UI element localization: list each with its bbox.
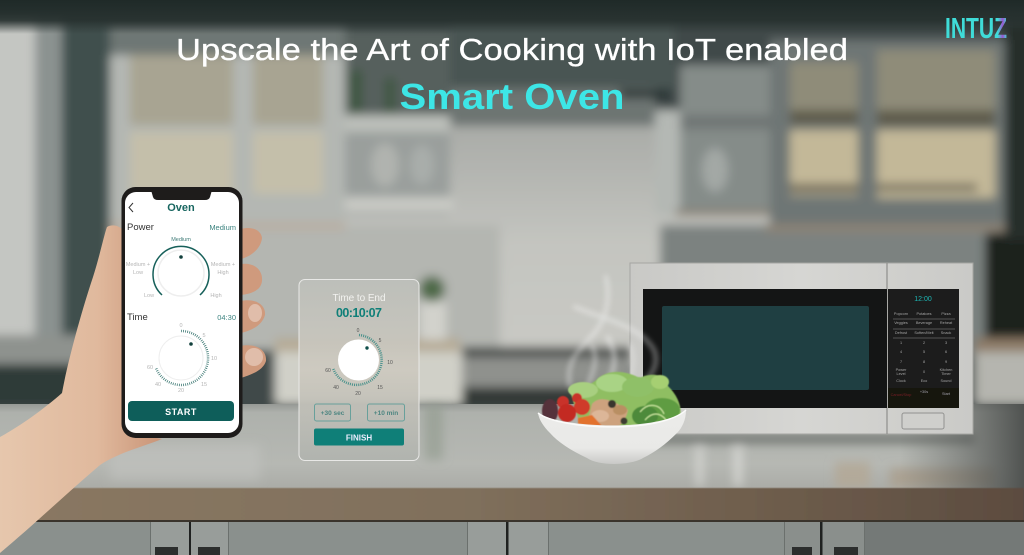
start button (128, 401, 234, 421)
control panel: Pizza (941, 312, 952, 316)
control panel: Power (896, 368, 907, 372)
salad (542, 372, 681, 428)
add 10 min button: +10 min (374, 410, 398, 417)
time heading: 04:30 (217, 313, 236, 322)
time to end label: Time to End (332, 293, 386, 304)
oven body (630, 263, 973, 434)
time dial: 5 (202, 333, 206, 339)
add 10 min button (368, 404, 404, 421)
control panel: 0 (923, 370, 925, 374)
microwave oven (630, 263, 973, 434)
control panel: Cancel/Stop (891, 393, 911, 397)
power dial: Medium + (211, 262, 235, 268)
timer dial (325, 328, 393, 397)
app header (129, 202, 195, 214)
control panel: Defrost (895, 331, 908, 335)
timer dial: 40 (333, 385, 339, 391)
right wall cabinets (655, 20, 1024, 354)
timer dial: 5 (379, 338, 382, 344)
phone frame (122, 187, 242, 438)
timer dial: 60 (325, 368, 331, 374)
power dial (126, 237, 235, 299)
title (176, 32, 848, 117)
phone (122, 187, 242, 438)
timer dial: 0 (357, 328, 360, 334)
control panel: Kitchen (940, 368, 952, 372)
countertop (0, 404, 1024, 490)
countdown: 00:10:07 (336, 306, 382, 320)
finish button: FINISH (346, 434, 372, 442)
side shelf and plant (275, 338, 460, 352)
time dial: 10 (211, 356, 217, 362)
control panel: Sound (941, 379, 951, 383)
start button: START (165, 407, 197, 417)
title: Upscale the Art of Cooking with IoT enabled (176, 32, 848, 67)
add 30 sec button: +30 sec (321, 410, 345, 417)
wooden counter edge (0, 488, 1024, 521)
oven door window (643, 289, 887, 408)
control panel: 3 (945, 341, 947, 345)
bowl of salad (538, 372, 686, 464)
control panel: Soften/Melt (914, 331, 935, 335)
time dial: 60 (147, 365, 153, 371)
hood (450, 20, 675, 90)
control panel: Veggies (894, 321, 908, 325)
control panel: Clock (896, 379, 906, 383)
hand holding phone (0, 225, 266, 553)
control panel: Eco (921, 379, 927, 383)
steam (569, 277, 656, 392)
control panel (888, 289, 959, 408)
lower cabinets (0, 520, 1024, 555)
timer dial: 20 (355, 391, 361, 397)
power dial: High (217, 270, 229, 276)
control panel: 4 (900, 350, 902, 354)
power dial: Low (144, 293, 154, 299)
door handle button (902, 413, 944, 429)
power dial: High (210, 293, 222, 299)
control panel: 6 (945, 350, 947, 354)
power dial: Low (133, 270, 143, 276)
power dial: Medium + (126, 262, 150, 268)
control panel: 7 (900, 360, 902, 364)
title: Smart Oven (400, 76, 624, 117)
control panel: Potatoes (916, 312, 932, 316)
app header: Oven (167, 202, 195, 214)
fingernails (245, 304, 263, 366)
power heading (127, 222, 236, 233)
glass timer card (299, 280, 419, 460)
control panel: Start (942, 392, 951, 396)
time dial: 20 (178, 388, 184, 394)
timer dial: 15 (377, 385, 383, 391)
control panel: 12:00 (914, 296, 932, 303)
left wall and window (0, 20, 110, 406)
finish button (314, 428, 404, 446)
control panel: 2 (923, 341, 925, 345)
wrist and palm (0, 225, 162, 553)
power dial: Medium (171, 237, 191, 243)
control panel: Level (896, 372, 906, 376)
time heading (127, 312, 236, 323)
control panel: Beverage (916, 321, 932, 325)
control panel: Reheat (940, 321, 953, 325)
add 30 sec button (314, 404, 350, 421)
bowl (538, 410, 686, 464)
control panel: 5 (923, 350, 925, 354)
power heading: Medium (209, 223, 236, 232)
time dial (147, 323, 217, 394)
stove strip (462, 347, 632, 357)
time dial: 40 (155, 382, 161, 388)
fingers (241, 228, 266, 378)
time heading: Time (127, 312, 148, 323)
power heading: Power (127, 222, 154, 233)
timer dial: 10 (387, 360, 393, 366)
time dial: 15 (201, 382, 207, 388)
control panel: Timer (941, 372, 952, 376)
control panel: 9 (945, 360, 947, 364)
control panel: 1 (900, 341, 902, 345)
time dial: 0 (179, 323, 183, 329)
control panel: 8 (923, 360, 925, 364)
control panel: +30s (920, 390, 928, 394)
control panel: Popcorn (894, 312, 908, 316)
control panel: Snack (941, 331, 951, 335)
left wall cabinets (110, 25, 453, 230)
